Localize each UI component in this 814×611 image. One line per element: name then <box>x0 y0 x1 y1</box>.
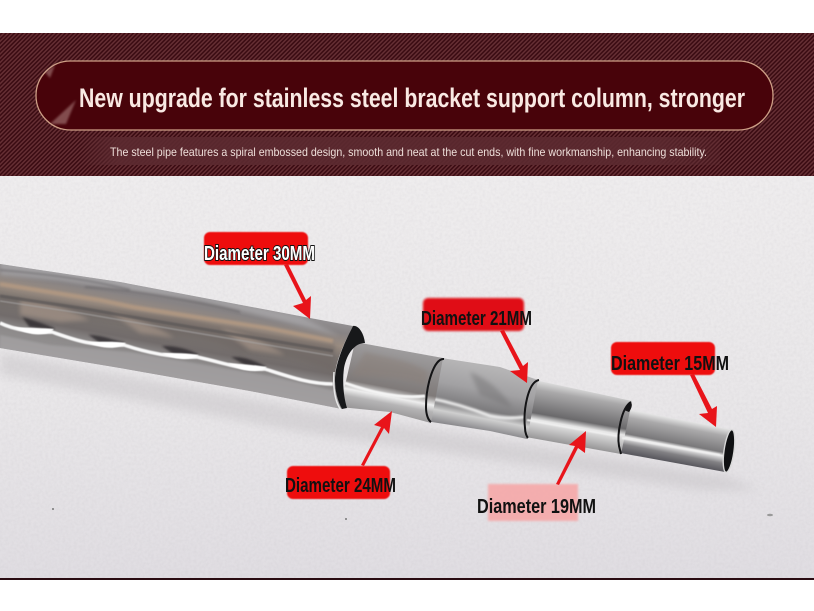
spiral highlight <box>0 323 333 384</box>
callout: diameter 15mm <box>611 342 729 427</box>
bottom rule <box>0 578 814 580</box>
callout: diameter 21mm <box>421 298 532 383</box>
lower lighter band <box>0 335 340 412</box>
spiral surface detail <box>0 262 340 412</box>
callout: diameter 30mm <box>204 232 315 319</box>
section: 30mm spiral tube <box>0 264 353 409</box>
section: 19mm tube <box>520 379 632 454</box>
callout: diameter 19mm <box>477 431 596 521</box>
callout: diameter 30mm: Diameter 30MM <box>204 243 315 265</box>
title pill <box>36 61 773 130</box>
section: 24mm tube <box>340 342 443 423</box>
callout: diameter 24mm <box>285 411 396 499</box>
pipe soft shadow <box>0 352 760 490</box>
callout: diameter 15mm: Diameter 15MM <box>611 353 729 375</box>
photo panel: stainless steel pipe <box>0 176 814 579</box>
specks <box>52 508 54 510</box>
weld seam <box>0 284 333 341</box>
section: 15mm tube <box>615 408 733 472</box>
header band <box>0 33 814 176</box>
dark patches above wave <box>25 319 265 367</box>
pill glare <box>45 65 76 124</box>
subtitle band <box>80 137 720 165</box>
tube openings <box>335 326 365 409</box>
callout: diameter 24mm: Diameter 24MM <box>285 475 396 497</box>
callout: diameter 19mm: Diameter 19MM <box>477 496 596 518</box>
section: 21mm tube <box>425 357 538 439</box>
callout: diameter 21mm: Diameter 21MM <box>421 308 532 330</box>
pipe end opening <box>721 429 737 473</box>
subtitle: The steel pipe features a spiral embossed design, smooth and neat at the cut ends, with fine workmanship, enhancing stability. <box>110 145 707 159</box>
